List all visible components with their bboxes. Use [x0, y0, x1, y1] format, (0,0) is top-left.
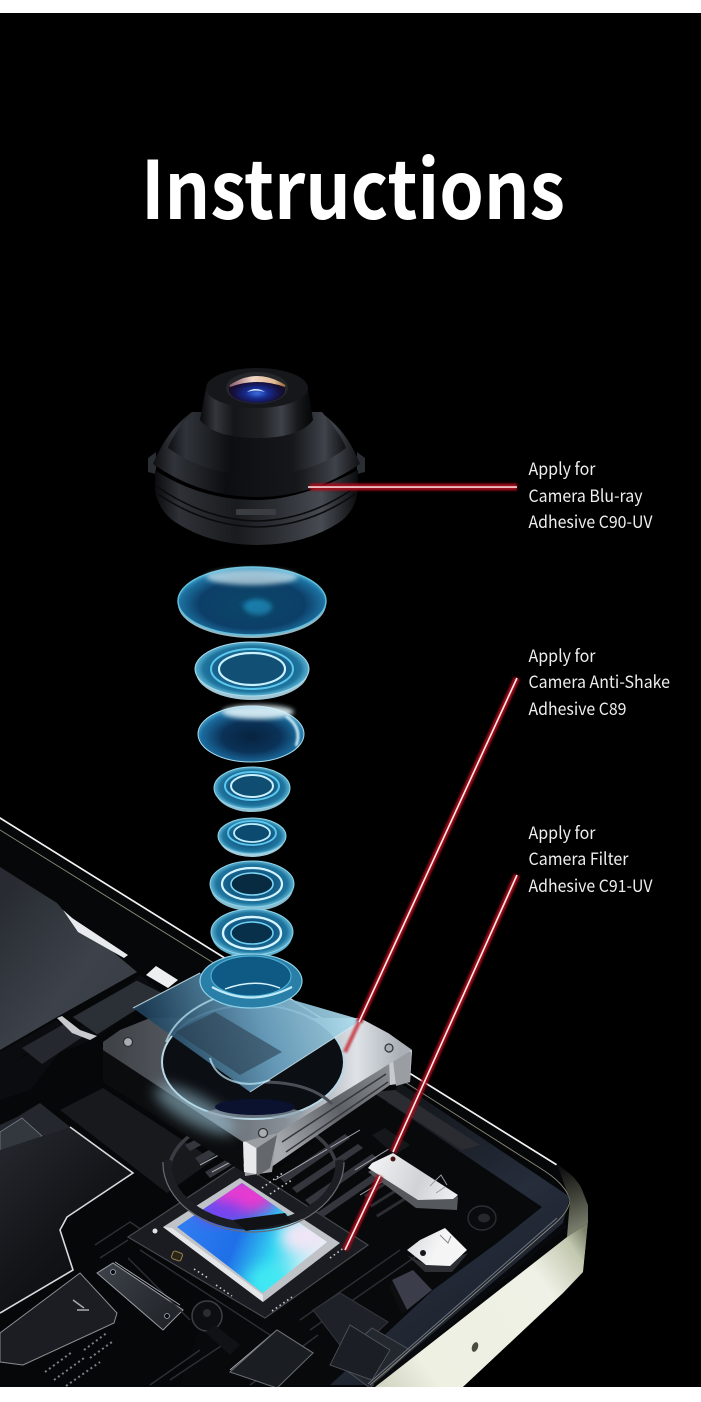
arrow glyph mark — [73, 1300, 89, 1310]
label: Blu-ray adhesive — [528, 455, 653, 533]
panel bright edge — [0, 1127, 133, 1313]
label: Filter adhesive: Camera Filter — [528, 845, 629, 870]
title: Instructions — [141, 127, 565, 243]
grey bar behind laser — [372, 1090, 480, 1150]
upper step — [168, 412, 346, 475]
frame stripes — [282, 1074, 388, 1152]
white panel highlight — [63, 910, 128, 958]
lens 3 — [198, 705, 304, 762]
circuit traces — [95, 1222, 425, 1385]
silver tag 2 — [407, 1228, 468, 1272]
frame top face — [103, 1018, 412, 1142]
opening sheen — [149, 1077, 241, 1143]
ring tab — [233, 1213, 292, 1231]
corner bevel — [557, 1164, 588, 1237]
camera hole — [468, 1206, 496, 1230]
stabiliser frame — [103, 1005, 412, 1176]
ring back stroke — [169, 1117, 337, 1227]
groove panels — [0, 975, 163, 1100]
trace bright lines — [115, 1130, 400, 1385]
lens 2 — [195, 642, 309, 700]
ring front stroke — [168, 1160, 339, 1226]
base grooves — [156, 486, 357, 527]
large dark panel — [0, 1127, 133, 1313]
lens 4 — [214, 767, 290, 812]
top barrel — [200, 388, 313, 438]
label: Anti-Shake adhesive: Camera Anti-Shake — [528, 668, 670, 693]
screw holes — [124, 1038, 393, 1138]
label: Blu-ray adhesive: Camera Blu-ray — [528, 482, 643, 507]
tray plane — [60, 1088, 213, 1193]
connector knob — [192, 1301, 240, 1355]
right end block — [388, 1033, 412, 1085]
sensor plate — [128, 1163, 368, 1318]
metal strip — [97, 1263, 183, 1330]
top-left battery panel — [0, 867, 137, 1050]
label: Anti-Shake adhesive: Apply for — [528, 642, 596, 667]
black upper well components — [372, 1128, 410, 1155]
strip holes — [110, 1270, 170, 1318]
silver tag 1 shadow — [368, 1170, 458, 1210]
label: Blu-ray adhesive: Apply for — [528, 455, 596, 480]
inner stage crescent — [205, 1105, 305, 1118]
callout line 2 — [345, 678, 517, 1052]
lens 7 — [211, 909, 293, 958]
rim lines — [0, 830, 570, 1386]
dark cube — [392, 1270, 432, 1310]
glass lens arc — [166, 988, 270, 1084]
frame left face — [103, 1045, 243, 1172]
glass reflection inside — [175, 1012, 282, 1075]
outer bright edge — [0, 817, 557, 1164]
glass edge — [133, 973, 362, 1092]
label: Anti-Shake adhesive: Adhesive C89 — [528, 695, 626, 720]
base notch — [236, 509, 276, 515]
lens 6 — [210, 861, 294, 911]
label: Anti-Shake adhesive — [528, 642, 670, 720]
label: Filter adhesive: Adhesive C91-UV — [528, 872, 653, 897]
lens 1 — [178, 567, 326, 638]
frame hole — [472, 1342, 478, 1352]
callout line 1 — [308, 484, 517, 490]
glass reflection — [247, 389, 265, 392]
phone frame band — [375, 1223, 588, 1387]
mid cone — [153, 412, 360, 497]
base body — [155, 470, 358, 545]
PCB dots — [45, 1332, 112, 1386]
lens stack — [178, 567, 326, 1008]
barrel top face — [206, 368, 308, 408]
frame right face — [270, 1050, 412, 1168]
inner well — [250, 1102, 542, 1385]
small stacked panels — [0, 1103, 70, 1136]
rails around sensor — [185, 1134, 377, 1217]
lower panel — [0, 1273, 117, 1365]
label: Filter adhesive — [528, 819, 653, 897]
flange ears — [148, 452, 365, 474]
frame circular opening — [162, 1005, 344, 1119]
pad rows — [194, 1172, 345, 1311]
lower rim panel — [330, 1325, 390, 1380]
lens 5 — [218, 818, 286, 857]
silver tag 1 — [368, 1153, 458, 1200]
camera module — [148, 368, 365, 545]
navy rim band — [330, 1084, 570, 1385]
gold connector — [171, 1251, 183, 1261]
lens 8 — [200, 954, 302, 1008]
sensor silver frame — [163, 1178, 340, 1302]
bottom right panels — [230, 1330, 313, 1388]
callout line 3 — [345, 875, 517, 1250]
phone internals — [0, 817, 588, 1388]
back ring through opening — [262, 1082, 332, 1104]
solder pad dot — [152, 1228, 158, 1234]
image sensor — [152, 1172, 345, 1311]
label: Blu-ray adhesive: Adhesive C90-UV — [528, 508, 653, 533]
phone base — [0, 817, 588, 1387]
silver tab — [146, 966, 178, 988]
glass top highlight — [230, 377, 285, 386]
sensor active area — [177, 1183, 327, 1293]
camera glass — [226, 372, 288, 404]
corner block — [243, 1133, 277, 1176]
silver clip — [57, 1016, 97, 1040]
blue glass filter — [133, 973, 362, 1092]
label: Filter adhesive: Apply for — [528, 819, 596, 844]
anti-shake ring — [163, 1117, 344, 1232]
